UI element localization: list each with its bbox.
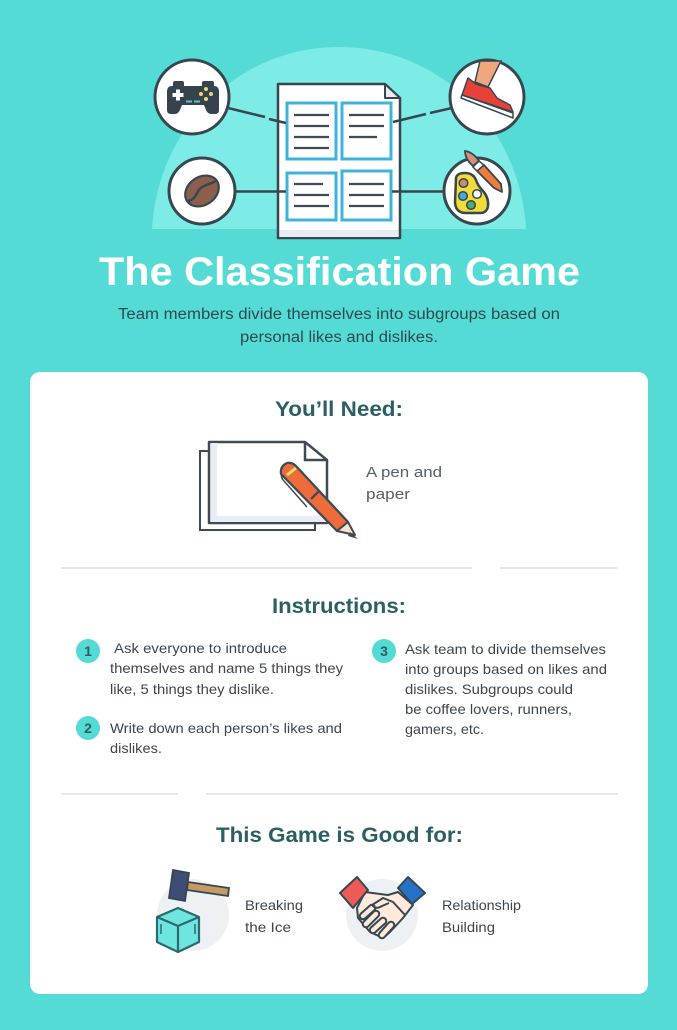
hero illustration [152,47,526,238]
icon: paper and pen [200,442,358,539]
panel: activity card [30,372,648,994]
title: The Classification Game [99,250,580,294]
step 2: 2 [84,720,92,736]
text: supplies: paper [366,486,410,503]
subtitle [118,306,560,346]
dome background [152,47,526,229]
step 1: Ask everyone to introduce [114,640,287,656]
step 3: gamers, etc. [405,721,484,737]
text: relationship building: Building [442,919,495,935]
icon: paint palette and brush [444,151,510,224]
step 2: dislikes. [110,740,162,756]
text: breaking the ice [245,897,303,935]
icon: hammer and ice [157,870,229,952]
step 3: 3 [380,643,388,659]
connector lines [228,108,452,192]
step 3: dislikes. Subgroups could [405,681,573,697]
icon: coffee bean [169,158,235,224]
text: relationship building: Relationship [442,897,521,913]
heading: instructions: Instructions: [272,595,406,618]
step 3: into groups based on likes and [405,661,607,677]
icon: document [278,84,400,238]
subtitle: personal likes and dislikes. [240,329,438,346]
step 1: 1 [84,643,92,659]
step 1: themselves and name 5 things they [110,660,343,676]
step 3: Ask team to divide themselves [405,641,606,657]
text: supplies: A pen and [366,464,442,481]
icon: running shoe [450,60,524,134]
step 1 [76,639,343,697]
text: supplies [366,464,442,503]
step 1: like, 5 things they dislike. [110,681,274,697]
heading: good for: This Game is Good for: [216,824,463,847]
step 3: be coffee lovers, runners, [405,701,572,717]
icon: handshake [340,877,425,951]
icon: game controller [155,60,229,134]
text: breaking the ice: Breaking [245,897,303,913]
step 2 [76,716,342,756]
step 2: Write down each person’s likes and [110,720,342,736]
heading: you'll need: You’ll Need: [275,398,403,421]
text: breaking the ice: the Ice [245,919,291,935]
step 3 [372,639,607,737]
subtitle: Team members divide themselves into subgroups based on [118,306,560,323]
text: relationship building [442,897,521,935]
